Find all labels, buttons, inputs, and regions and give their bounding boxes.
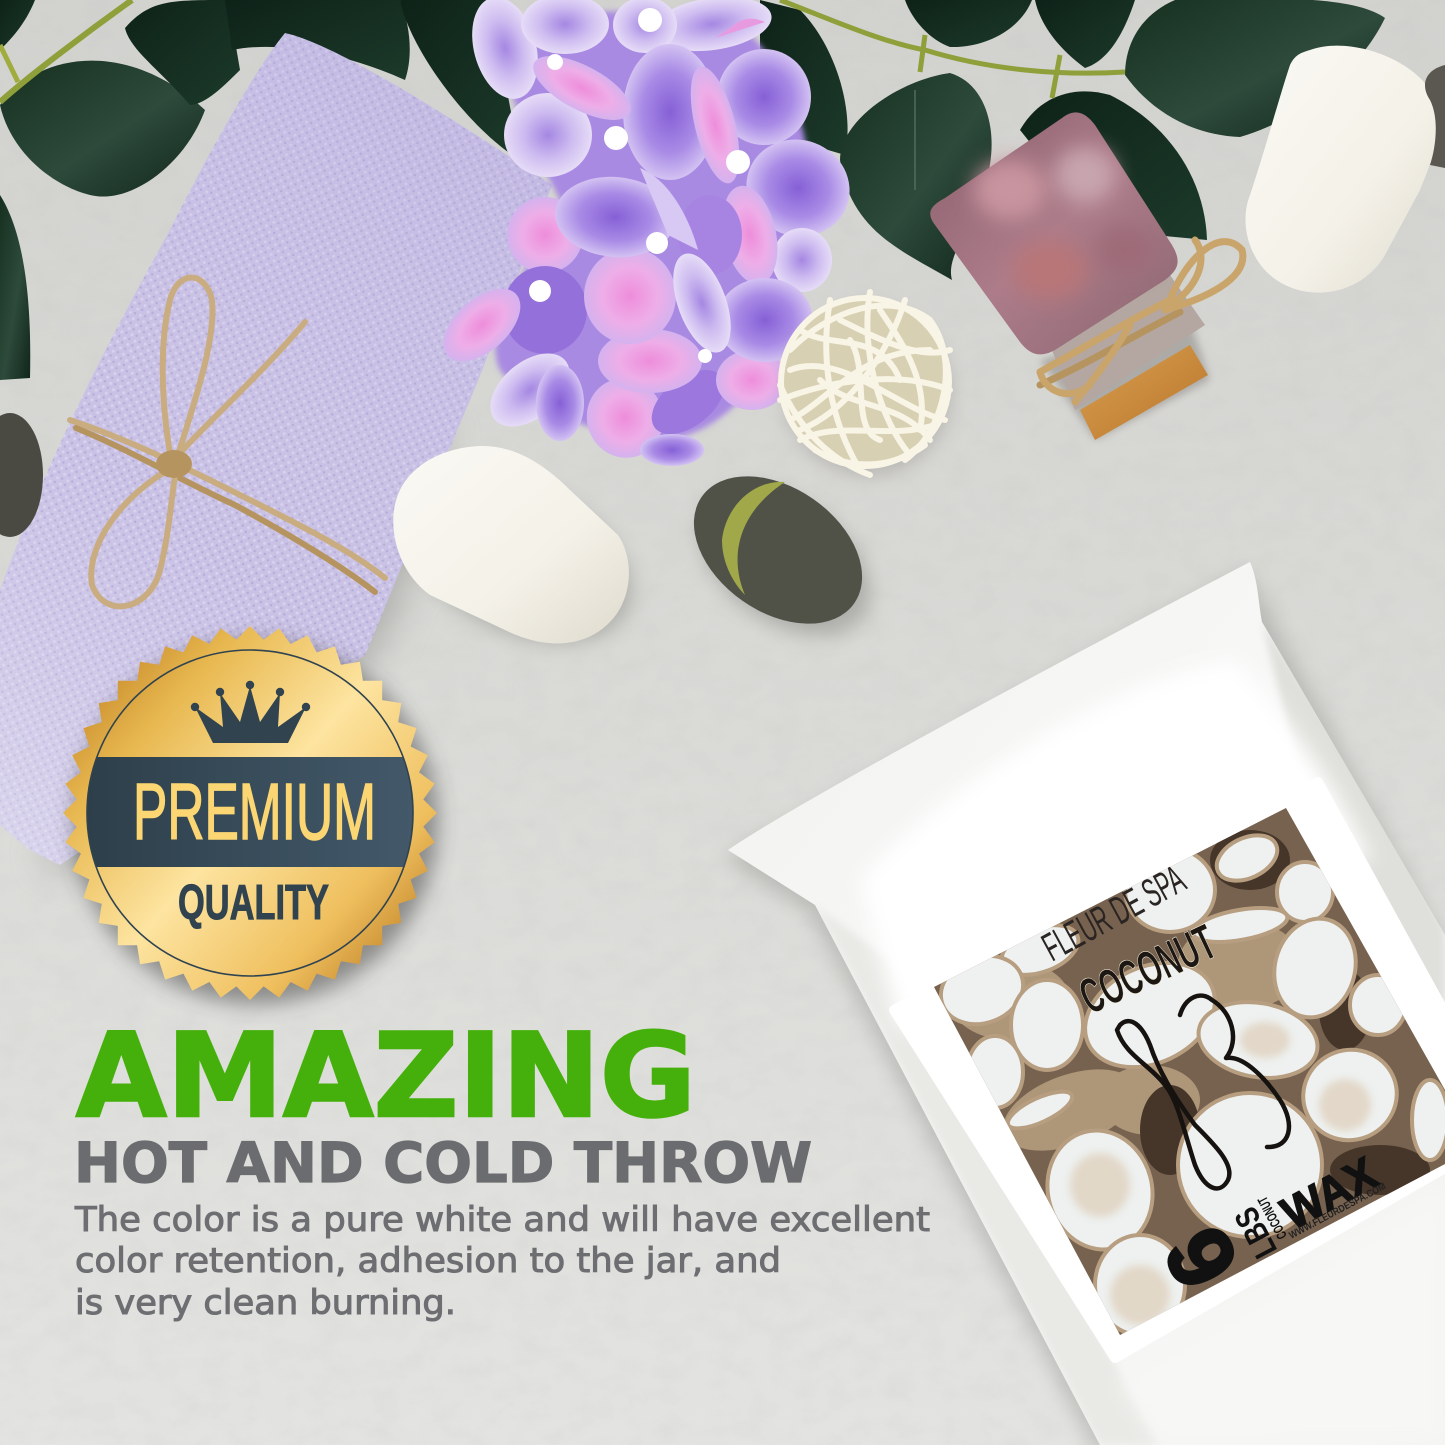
flowers: soft mass behind petals (495, 11, 811, 441)
photo: white pillar candle, centre (383, 445, 657, 675)
heading: AMAZING: AMAZING (76, 1009, 696, 1144)
label text: FLEUR DE SPA: FLEUR DE SPA (1035, 857, 1193, 970)
badge: premium quality gold seal (55, 618, 445, 1008)
label text: 6 LBS: 6 (1145, 1211, 1259, 1304)
photo: lavender towel with twine (0, 33, 552, 880)
body text: color retention, adhesion to the jar, and (75, 1241, 781, 1281)
photo: scrub salt jar with cork (930, 112, 1243, 440)
badge: dark band (87, 757, 413, 867)
photo: wicker ball (780, 292, 950, 475)
label photo: coconuts (920, 800, 1445, 1350)
badge text: QUALITY: QUALITY (178, 876, 329, 930)
body text: is very clean burning. (75, 1283, 456, 1323)
subheading: hot and cold throw: HOT AND COLD THROW (74, 1131, 812, 1195)
label text: website: WWW.FLEURDESPA.COM (1287, 1181, 1388, 1242)
label text: WAX: WAX (1273, 1146, 1386, 1239)
photo: left stone (0, 413, 43, 537)
product: wax bag (724, 562, 1445, 1445)
photo: leaves and stems (0, 0, 1385, 380)
photo: mossy stone (666, 446, 897, 666)
icon: crown (191, 681, 310, 743)
badge text: PREMIUM: PREMIUM (133, 767, 376, 856)
body text (74, 1200, 930, 1323)
label text: 6 LBS: LBS (1227, 1201, 1284, 1264)
photo: stone, right edge (1425, 65, 1445, 168)
badge: thin ring (87, 650, 413, 976)
badge: serrated gold edge (55, 618, 445, 1008)
body text: The color is a pure white and will have excellent (74, 1200, 930, 1240)
label text: 6 LBS (1145, 1194, 1290, 1304)
label: script monogram (1117, 996, 1289, 1188)
photo: white pillar candle, top right (1245, 46, 1438, 293)
label text: 6 LBS: COCONUT (1254, 1194, 1290, 1242)
label text: COCONUT: COCONUT (1071, 914, 1224, 1025)
icon group: white flower stamens (529, 8, 750, 363)
product label: white sticker (894, 782, 1445, 1358)
photo: purple hydrangea flowers (430, 0, 863, 469)
